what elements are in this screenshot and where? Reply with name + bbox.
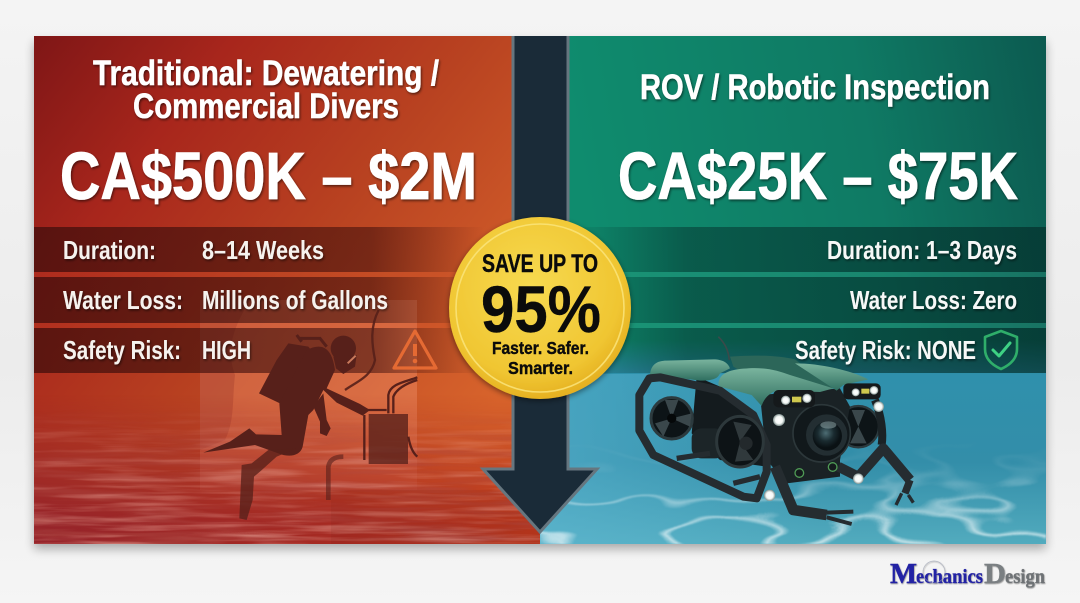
panel: traditional method — [34, 36, 540, 544]
heading: traditional — [93, 54, 439, 126]
right shell — [795, 363, 868, 391]
heading: ROV: ROV / Robotic Inspection — [640, 68, 990, 107]
mask glass — [348, 356, 356, 363]
submerged pipe — [328, 457, 343, 500]
icon: warning triangle — [394, 331, 436, 368]
illustration: diver at equipment box — [203, 310, 417, 520]
left data rows: Duration: — [63, 235, 156, 265]
manipulator arms — [775, 448, 913, 524]
center shell — [718, 368, 833, 406]
logo: Mechanics Design — [890, 559, 1045, 590]
light housings — [773, 390, 815, 407]
data band: right duration — [568, 227, 1046, 272]
rear thruster — [651, 398, 692, 439]
torso and arms — [203, 347, 370, 456]
icon: green shield — [985, 331, 1017, 369]
badge: save up to 95%: 95% — [481, 272, 601, 346]
water ripples — [34, 410, 540, 544]
panel: ROV method — [540, 36, 1046, 544]
left shell — [650, 359, 730, 381]
camera lens — [793, 405, 850, 462]
equipment box — [369, 414, 408, 464]
left data rows: HIGH — [202, 335, 251, 365]
sensor rings — [795, 469, 804, 477]
thruster cylinder — [692, 428, 725, 458]
antenna — [718, 337, 729, 360]
left data rows: 8–14 Weeks — [202, 235, 324, 265]
water surface — [34, 395, 540, 544]
right data rows: Water Loss: Zero — [850, 285, 1017, 315]
left data rows: Water Loss: — [63, 285, 183, 315]
lamps — [764, 386, 884, 501]
logo: Mechanics Design: echanics — [916, 566, 983, 588]
left data rows: Millions of Gallons — [202, 285, 388, 315]
right data rows: Duration: 1–3 Days — [827, 235, 1017, 265]
data band: left duration — [34, 227, 484, 272]
price: traditional: CA$500K – $2M — [60, 139, 477, 214]
data band: right safety risk — [568, 328, 1046, 373]
back shell — [730, 356, 833, 392]
badge: save up to 95%: Smarter. — [508, 358, 573, 378]
illustration: ROV robot — [639, 337, 913, 524]
lower leg and fin — [239, 448, 297, 520]
logo: Mechanics Design: D — [984, 559, 1006, 590]
darker water block — [331, 490, 540, 544]
air hose — [345, 310, 379, 390]
water caustics — [540, 458, 1046, 544]
data band: left water loss — [34, 277, 484, 323]
scuba tank — [259, 343, 315, 403]
center arrow — [483, 30, 597, 532]
logo: Mechanics Design: esign — [1005, 566, 1045, 588]
heading: traditional: Commercial Divers — [133, 87, 399, 126]
left data rows: Safety Risk: — [63, 335, 181, 365]
heading: traditional: Traditional: Dewatering / — [93, 54, 439, 93]
right thruster — [838, 406, 879, 447]
main body — [760, 388, 850, 483]
lit chamber behind diver — [200, 300, 417, 490]
front thruster — [717, 416, 763, 467]
data band: right water loss — [568, 277, 1046, 323]
data band: left safety risk — [34, 328, 484, 373]
panel shadow — [34, 42, 1046, 549]
gap highlight: right rows — [590, 272, 1046, 328]
right data rows — [795, 235, 1017, 365]
head — [331, 336, 356, 361]
right strut — [875, 400, 882, 445]
side frame — [639, 377, 767, 498]
badge: save up to 95% — [449, 217, 631, 399]
gap highlight: left rows — [34, 272, 464, 328]
logo: Mechanics Design: M — [890, 559, 917, 590]
badge: save up to 95%: Faster. Safer. — [492, 338, 589, 358]
right data rows: Safety Risk: NONE — [795, 335, 976, 365]
lower cross bars — [677, 453, 760, 483]
dark hull behind frame — [692, 377, 767, 467]
badge: save up to 95%: SAVE UP TO — [482, 250, 598, 278]
left data rows — [63, 235, 388, 365]
